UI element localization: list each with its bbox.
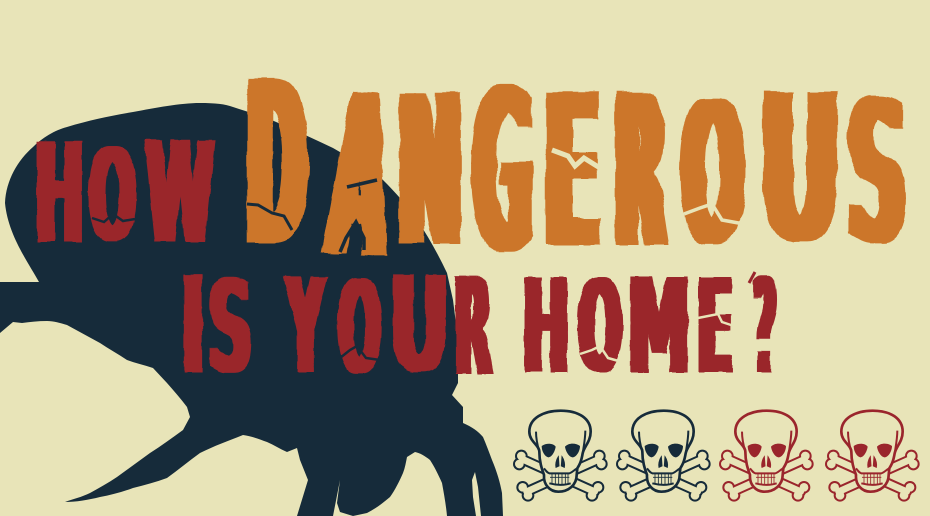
word: DANGEROUS: E [544,48,600,299]
word: HOME?: O [578,253,622,401]
icon: skull 4 red [825,411,920,502]
word: DANGEROUS [247,30,906,313]
word: DANGEROUS: O [682,59,743,292]
hazard rating: skulls [513,411,920,502]
word: IS YOUR: U [390,248,449,403]
word: HOME?: ? [754,251,776,406]
icon: skull 3 red [719,411,814,502]
word: HOW [35,111,214,277]
word: DANGEROUS: D [247,30,306,300]
word: HOW: W [146,111,214,277]
word: DANGEROUS: U [760,50,840,291]
word: HOW: O [89,120,136,272]
word: HOME?: H [523,250,569,404]
word: DANGEROUS: A [322,43,397,313]
word: HOME? [523,249,776,406]
icon: skull 1 navy [513,411,608,502]
word: IS YOUR: O [338,254,381,405]
title [35,30,906,408]
word: IS YOUR: I [182,246,204,405]
word: IS YOUR: Y [286,249,325,405]
word: DANGEROUS: R [615,47,665,298]
word: IS YOUR: R [455,250,491,408]
word: DANGEROUS: N [398,49,462,297]
word: HOME?: E [697,249,733,405]
word: DANGEROUS: G [473,40,532,304]
beetle silhouette [0,103,503,516]
word: HOME?: M [628,251,690,405]
word: IS YOUR [182,246,491,408]
icon: skull 2 navy [616,411,711,502]
word: IS YOUR: S [209,253,252,403]
word: DANGEROUS: S [848,57,906,289]
word: HOW: H [35,114,84,277]
